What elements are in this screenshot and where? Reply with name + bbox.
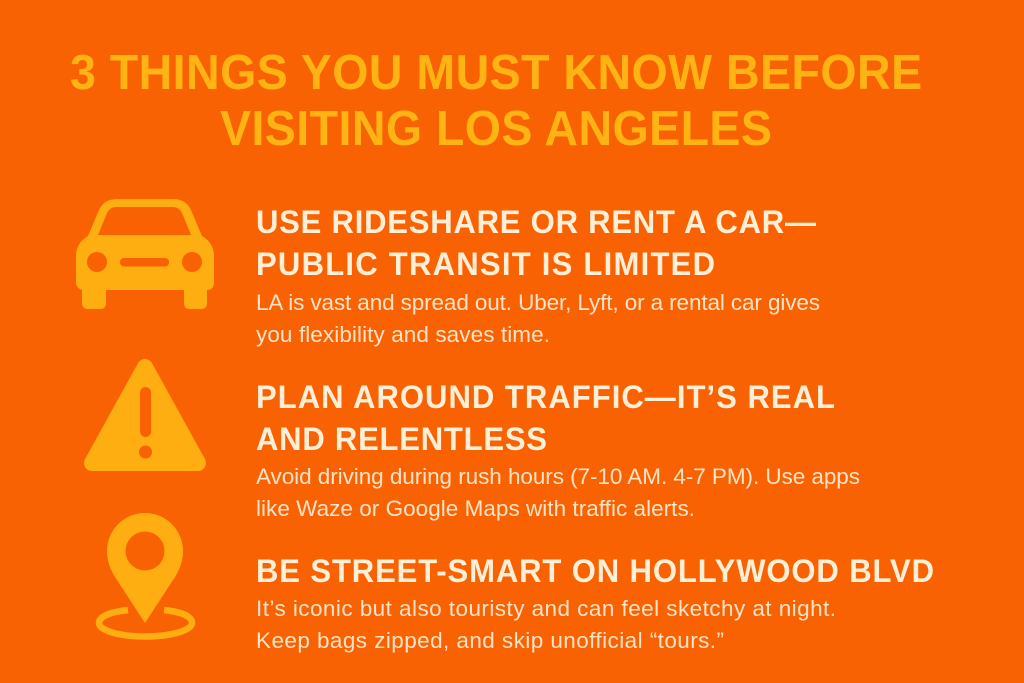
icon: location pin [99,513,192,636]
section 2 text [256,379,860,521]
section 3 text: Keep bags zipped, and skip unofficial “tours.” [256,628,724,653]
section 3 text: BE STREET-SMART ON HOLLYWOOD BLVD [256,553,934,589]
section 2 text: AND RELENTLESS [256,421,547,457]
section 2 text: PLAN AROUND TRAFFIC—IT’S REAL [256,379,835,415]
section 1 text: USE RIDESHARE OR RENT A CAR— [256,204,816,240]
icon: warning triangle [92,367,198,463]
section 1 text: PUBLIC TRANSIT IS LIMITED [256,246,715,282]
section 1 text: LA is vast and spread out. Uber, Lyft, or a rental car gives [256,290,820,315]
title: VISITING LOS ANGELES [220,102,772,156]
title [70,46,922,156]
section 1 text: you flexibility and saves time. [256,322,550,347]
title: 3 THINGS YOU MUST KNOW BEFORE [70,46,922,100]
section 3 text: It’s iconic but also touristy and can feel sketchy at night. [256,596,836,621]
icon: car [76,199,214,309]
section 3 text [256,553,934,653]
section 2 text: Avoid driving during rush hours (7-10 AM. 4-7 PM). Use apps [256,464,860,489]
section 2 text: like Waze or Google Maps with traffic alerts. [256,496,695,521]
section 1 text [256,204,820,347]
